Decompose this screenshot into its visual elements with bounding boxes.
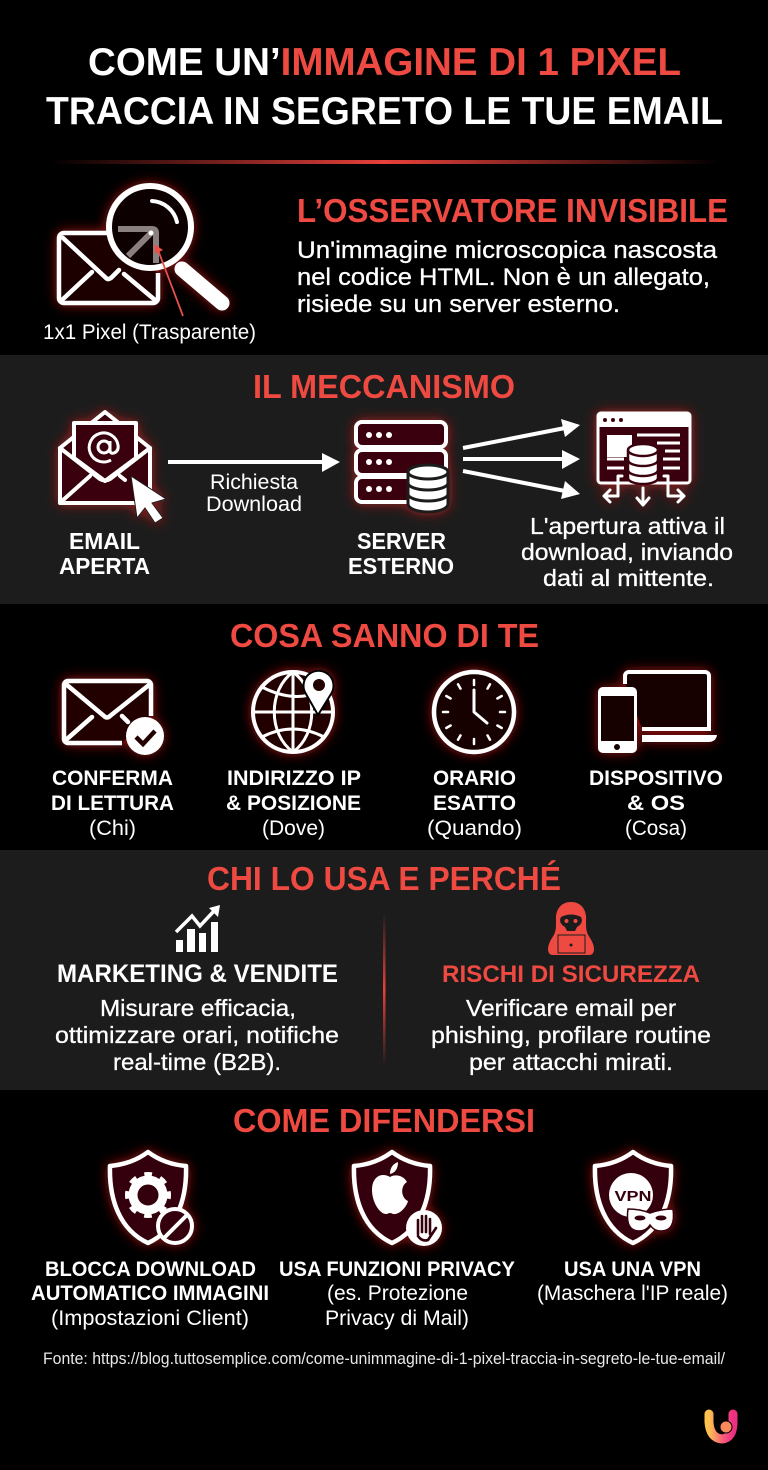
heading: chi lo usa: CHI LO USA E PERCHÉ [207,860,561,897]
label: email aperta: EMAIL [69,528,140,554]
item: blocca download: (Impostazioni Client) [51,1307,249,1330]
item: orario esatto: ORARIO [433,767,516,790]
label: richiesta download: Richiesta [210,471,298,494]
text: mechanism description: L'apertura attiva il [530,513,725,539]
item: conferma di lettura: (Chi) [89,817,136,840]
item: funzioni privacy: USA FUNZIONI PRIVACY [279,1258,515,1281]
icon: shield with apple [354,1152,442,1246]
item: conferma di lettura [51,767,174,840]
panel: il meccanismo [0,355,768,604]
item: orario esatto: ESATTO [433,792,516,815]
panel: chi lo usa e perche [0,850,768,1090]
arrow: pixel pointer [154,244,183,316]
panel: l'osservatore invisibile [43,186,728,344]
icon: growth chart [176,905,220,952]
arrows: data fan-out [463,419,580,499]
item: blocca download: AUTOMATICO IMMAGINI [31,1282,269,1305]
item: blocca download: BLOCCA DOWNLOAD [45,1258,256,1281]
source line: Fonte: https://blog.tuttosemplice.com/come-unimmagine-di-1-pixel-traccia-in-segreto-le-tue-email/ [43,1350,725,1368]
panel: cosa sanno di te [51,617,723,840]
heading: come difendersi: COME DIFENDERSI [233,1102,535,1139]
heading: marketing: MARKETING & VENDITE [57,960,338,988]
text: marketing description: Misurare efficacia, [100,995,296,1021]
text: marketing description [55,995,339,1075]
text: rischi description: phishing, profilare routine [431,1022,711,1048]
label: server esterno: ESTERNO [348,553,454,579]
text: mechanism description: dati al mittente. [543,565,714,591]
item: indirizzo ip: INDIRIZZO IP [227,767,361,790]
heading: meccanismo: IL MECCANISMO [253,368,515,405]
text: osservatore description: risiede su un server esterno. [297,291,620,318]
icon: shield with vpn mask: VPN [614,1188,652,1205]
text: rischi description: per attacchi mirati. [469,1049,673,1075]
icon: server with database [356,422,448,512]
text: osservatore description: Un'immagine microscopica nascosta [297,237,718,264]
item: orario esatto [427,767,522,840]
label: email aperta: APERTA [59,553,150,579]
icon: envelope with check [64,681,164,755]
logo [709,1414,733,1439]
panel: come difendersi [31,1102,728,1330]
icon: shield with vpn mask [595,1152,674,1243]
arrow: request [168,453,340,472]
label: server esterno: SERVER [357,528,446,554]
item: indirizzo ip [226,767,361,840]
item: orario esatto: (Quando) [427,817,522,840]
text: rischi description [431,995,711,1075]
label: server esterno [348,528,454,579]
label: email aperta [59,528,150,579]
title [46,41,723,133]
label: richiesta download [206,471,302,516]
icon: browser window with database [598,413,690,505]
item: usa una vpn [537,1258,728,1305]
item: indirizzo ip: & POSIZIONE [226,792,361,815]
item: dispositivo: & OS [627,792,685,815]
label: richiesta download: Download [206,493,302,516]
icon: hooded hacker [548,902,594,955]
icon: shield with gear [110,1152,192,1243]
item: conferma di lettura: CONFERMA [52,767,173,790]
icon: envelope with magnifier [59,186,222,303]
text: osservatore description [297,237,718,318]
text: mechanism description: download, inviando [521,539,733,565]
item: dispositivo [589,767,723,840]
item: usa una vpn: (Maschera l'IP reale) [537,1282,728,1305]
caption: 1x1 pixel: 1x1 Pixel (Trasparente) [43,321,256,344]
item: indirizzo ip: (Dove) [262,817,325,840]
item: dispositivo: DISPOSITIVO [589,767,723,790]
icon: globe with pin [253,671,334,752]
text: osservatore description: nel codice HTML. Non è un allegato, [297,264,710,291]
heading: osservatore: L’OSSERVATORE INVISIBILE [297,192,728,229]
item: funzioni privacy [279,1258,515,1330]
item: blocca download [31,1258,269,1330]
text: mechanism description [521,513,733,591]
item: usa una vpn: USA UNA VPN [564,1258,701,1281]
item: conferma di lettura: DI LETTURA [51,792,174,815]
text: marketing description: real-time (B2B). [113,1049,281,1075]
heading: cosa sanno: COSA SANNO DI TE [230,617,539,654]
title: TRACCIA IN SEGRETO LE TUE EMAIL [46,90,723,133]
title: COME UN’IMMAGINE DI 1 PIXEL [88,41,681,84]
item: funzioni privacy: (es. Protezione [327,1282,468,1305]
text: rischi description: Verificare email per [466,995,676,1021]
icon: clock [434,672,514,752]
heading: rischi: RISCHI DI SICUREZZA [442,961,700,988]
text: marketing description: ottimizzare orari, notifiche [55,1022,339,1048]
item: funzioni privacy: Privacy di Mail) [325,1307,469,1330]
item: dispositivo: (Cosa) [625,817,687,840]
icon: open email [60,412,166,523]
icon: phone and laptop [598,672,717,753]
